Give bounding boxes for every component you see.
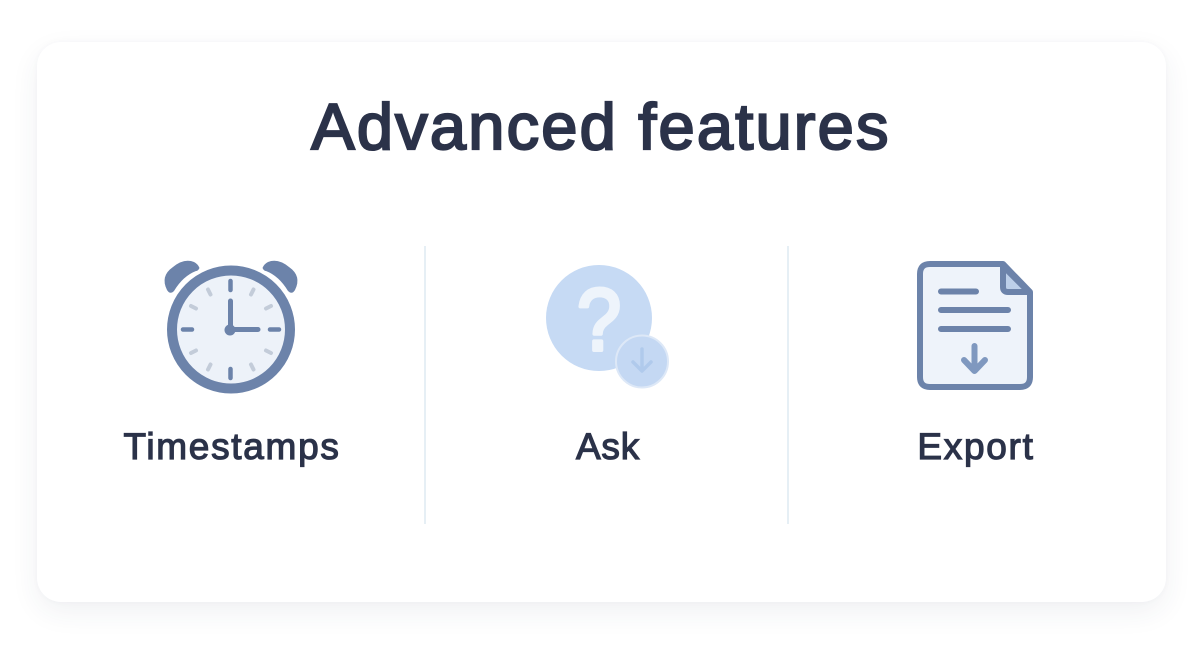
label: Ask: Ask	[576, 426, 640, 467]
title: Advanced features	[311, 90, 891, 163]
label: Export: Export	[917, 426, 1035, 467]
icon: question bubble with download badge: ?	[577, 270, 621, 369]
label: Timestamps: Timestamps	[123, 426, 341, 467]
